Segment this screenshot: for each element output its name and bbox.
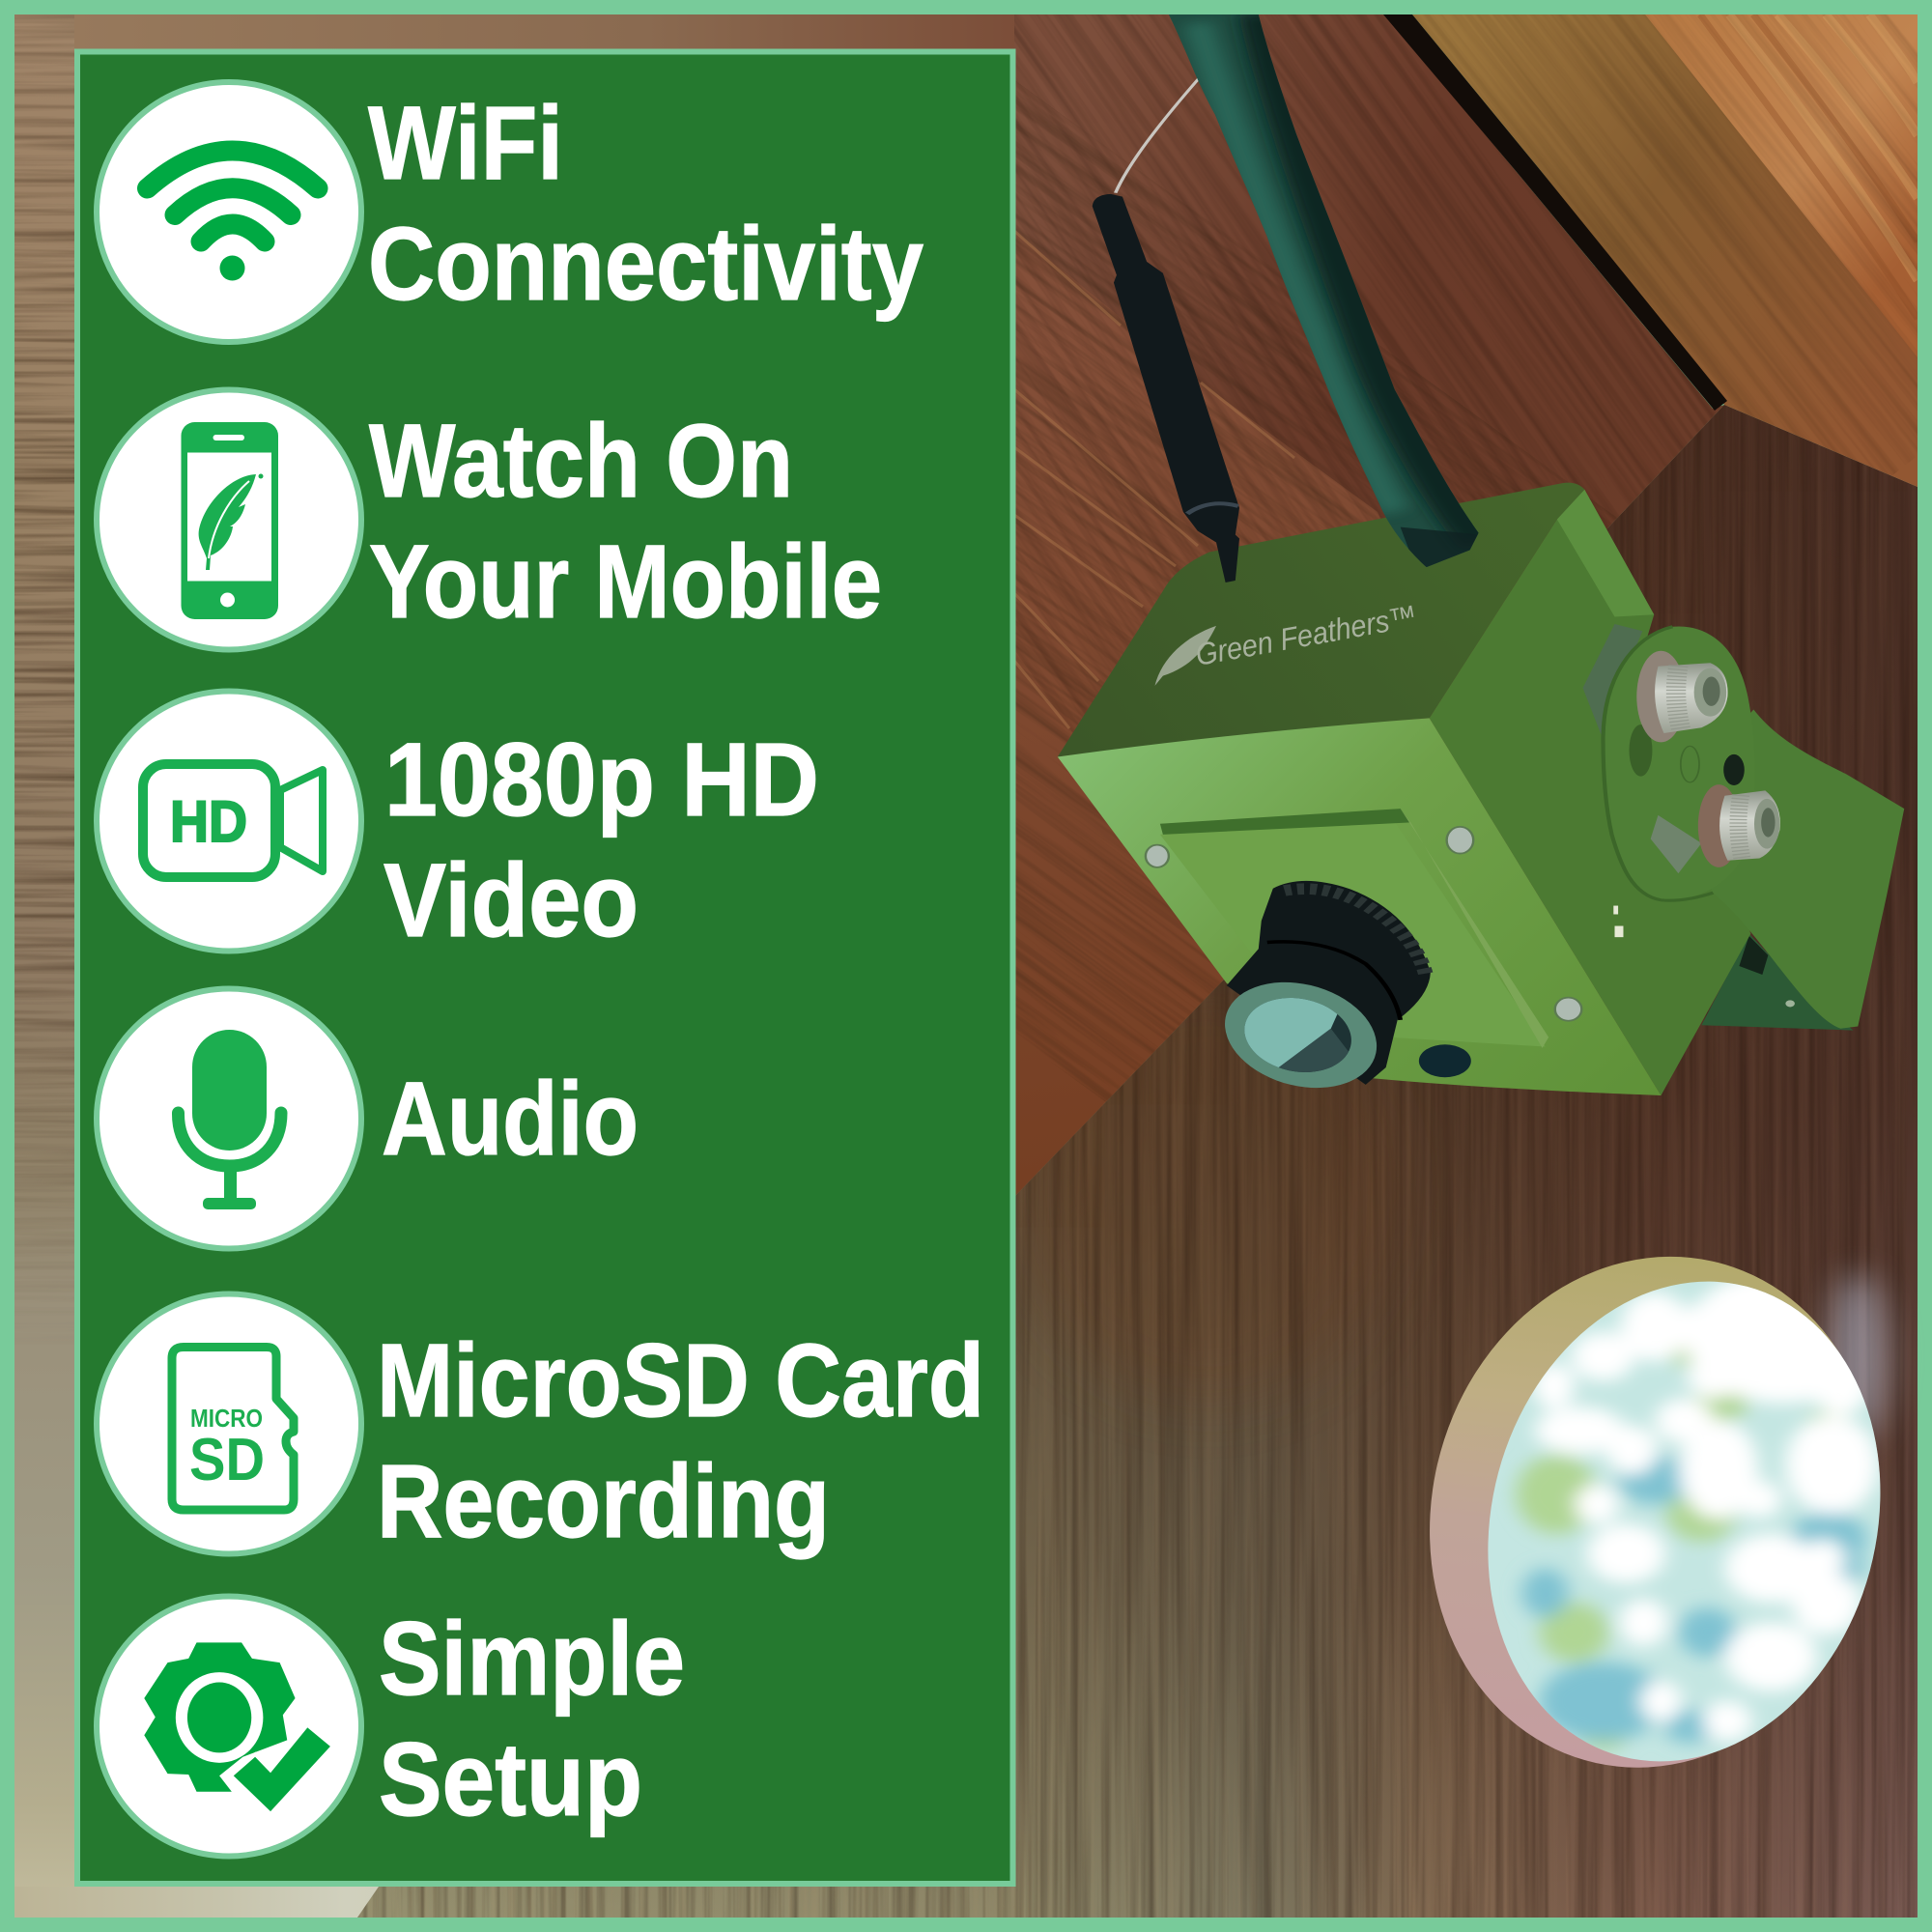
mounting plate left edge xyxy=(1604,627,1713,900)
lens front ring xyxy=(1197,960,1405,1110)
circle badge xyxy=(97,692,361,951)
wood: top band above panel xyxy=(74,14,1026,49)
panel fill and border xyxy=(77,52,1012,1884)
icon: HD video camera xyxy=(143,764,323,877)
text: Watch On Your Mobile: Your Mobile xyxy=(369,523,882,639)
mounting plate disc xyxy=(1604,626,1755,900)
icon: HD video camera: HD xyxy=(170,789,247,854)
wood: upper right golden plank xyxy=(1412,14,1918,487)
bolt: upper xyxy=(1636,651,1728,742)
text: WiFi Connectivity xyxy=(368,84,923,322)
feature: HD video xyxy=(97,692,819,958)
text: MicroSD Card Recording xyxy=(377,1321,984,1559)
mounting block xyxy=(1583,624,1642,740)
circle badge xyxy=(97,1596,361,1857)
text: WiFi Connectivity: Connectivity xyxy=(368,205,923,322)
top face of camera xyxy=(1058,483,1584,757)
icon: microSD card: MICRO xyxy=(190,1404,263,1433)
icon: wifi xyxy=(147,151,318,280)
thick antenna xyxy=(1157,12,1488,573)
text: Simple Setup: Simple xyxy=(379,1600,685,1717)
text: Watch On Your Mobile: Watch On xyxy=(369,402,793,519)
wood: left strip xyxy=(14,14,74,1918)
feature: watch on mobile xyxy=(97,390,882,649)
icon: gear with check mark xyxy=(144,1642,330,1811)
bolt: lower xyxy=(1698,784,1780,867)
bracket shadow xyxy=(1701,934,1853,1031)
text: MicroSD Card Recording: Recording xyxy=(377,1442,830,1559)
circle badge xyxy=(97,390,361,649)
wooden rim of hole xyxy=(1396,1235,1912,1790)
feature: microSD recording xyxy=(97,1294,984,1559)
logo feather on top face xyxy=(1154,626,1216,686)
panel: feature list xyxy=(77,52,1012,1884)
thin antenna xyxy=(1093,194,1239,582)
circle badge xyxy=(97,989,361,1248)
front inset recess xyxy=(1160,809,1548,1048)
text: Watch On Your Mobile xyxy=(369,402,882,639)
antenna wire xyxy=(1116,76,1201,193)
text: Audio: Audio xyxy=(382,1060,639,1177)
icon: smartphone with feather xyxy=(182,422,278,619)
mounting plate outer bracket xyxy=(1661,709,1904,1029)
icon: microphone xyxy=(178,1030,281,1209)
feature: WiFi connectivity xyxy=(97,82,923,342)
circle badge xyxy=(97,82,361,342)
antennas xyxy=(1093,12,1488,582)
screws on front face xyxy=(1146,827,1581,1021)
entrance hole with bokeh foliage xyxy=(1430,1256,1909,1768)
icon: microSD card xyxy=(172,1347,294,1510)
text: Simple Setup: Setup xyxy=(379,1720,642,1837)
specks on body xyxy=(1613,906,1795,1007)
lens glass xyxy=(1244,998,1351,1072)
text: 1080p HD Video xyxy=(384,721,819,958)
lens barrel xyxy=(1227,881,1431,1085)
icon: microSD card: SD xyxy=(189,1427,265,1493)
camera logo text: Green Feathers™ xyxy=(1193,598,1420,672)
wood: lower wall with vertical grain xyxy=(357,386,1922,1922)
text: 1080p HD Video: 1080p HD xyxy=(384,721,819,838)
circle badge xyxy=(97,1294,361,1553)
wood: crack between planks xyxy=(1383,14,1727,411)
camera body xyxy=(1058,483,1904,1110)
text: WiFi Connectivity: WiFi xyxy=(368,84,563,201)
feature: simple setup xyxy=(97,1596,685,1857)
plate slots and rivet xyxy=(1629,724,1745,873)
sky and foliage through hole xyxy=(1476,1270,1892,1771)
side face highlight strip xyxy=(1557,490,1654,616)
text: Simple Setup xyxy=(379,1600,685,1837)
wood: reddish diagonal planks xyxy=(1014,14,1724,1196)
text: MicroSD Card Recording: MicroSD Card xyxy=(377,1321,984,1438)
front face of camera xyxy=(1058,718,1661,1095)
wood: pale bottom left strip xyxy=(14,1887,382,1918)
feature: audio xyxy=(97,989,639,1248)
sensor hole xyxy=(1419,1044,1471,1077)
text: 1080p HD Video: Video xyxy=(384,841,639,958)
side face of camera xyxy=(1430,490,1750,1095)
bracket opening xyxy=(1739,936,1768,975)
glow around hole xyxy=(1829,1272,1887,1440)
